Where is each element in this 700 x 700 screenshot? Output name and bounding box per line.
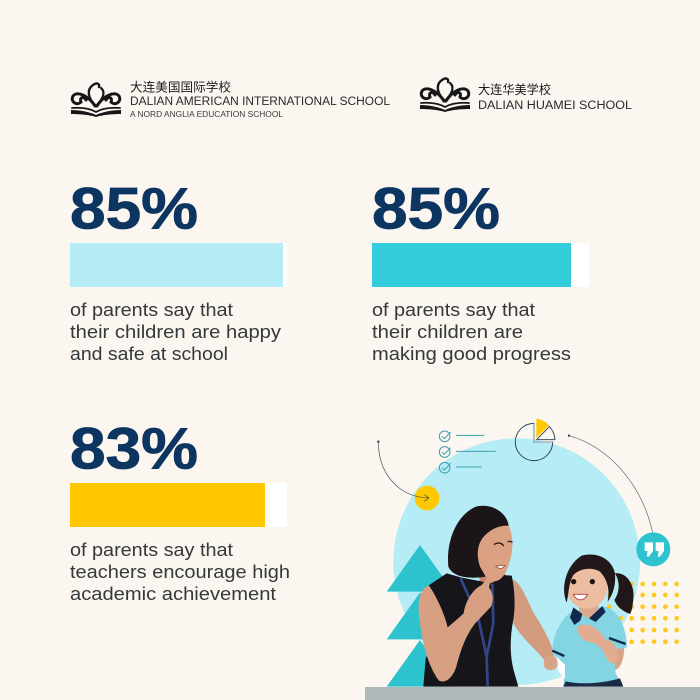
icon: checklist xyxy=(439,431,496,473)
background circle xyxy=(393,438,640,685)
lanyard xyxy=(461,578,493,687)
description: of parents say that xyxy=(372,299,535,320)
stat: academic achievement xyxy=(70,416,290,604)
face xyxy=(477,525,512,581)
description: their children are xyxy=(372,321,523,342)
school name in Chinese: 大连美国国际学校 xyxy=(130,80,231,94)
teacher xyxy=(419,506,554,687)
logo: Dalian American International School xyxy=(71,80,391,119)
description: of parents say that xyxy=(70,539,233,560)
description: and safe at school xyxy=(70,343,228,364)
ponytail xyxy=(614,573,634,614)
left arm and pointing hand xyxy=(419,572,493,681)
shirt xyxy=(552,607,627,687)
collar xyxy=(570,606,606,625)
school name in English: DALIAN HUAMEI SCHOOL xyxy=(478,100,633,112)
child forearm and hand xyxy=(578,624,618,663)
stat: good progress xyxy=(372,176,589,364)
child xyxy=(544,555,634,687)
icon: school crest xyxy=(420,79,470,112)
black dress xyxy=(423,573,518,687)
school name in Chinese: 大连华美学校 xyxy=(478,82,551,97)
school name in English: DALIAN AMERICAN INTERNATIONAL SCHOOL xyxy=(130,96,391,108)
dot grid xyxy=(607,582,679,644)
face xyxy=(566,565,607,609)
icon: school crest xyxy=(71,84,121,117)
percentage: 85% xyxy=(70,176,198,242)
illustration: teacher and child xyxy=(377,419,679,687)
tagline: A NORD ANGLIA EDUCATION SCHOOL xyxy=(130,110,284,119)
sleeve trim xyxy=(552,638,626,656)
stacked triangles xyxy=(387,545,453,687)
progress bar xyxy=(372,243,589,287)
description: of parents say that xyxy=(70,299,233,320)
neck xyxy=(478,567,505,587)
arrow: curved line to yellow circle xyxy=(377,440,439,510)
paper and teacher hand xyxy=(544,655,565,678)
description: their children are happy xyxy=(70,321,282,342)
skirt xyxy=(563,678,623,687)
percentage: 85% xyxy=(372,176,500,242)
description: making good progress xyxy=(372,343,571,364)
stat: happy and safe xyxy=(70,176,287,364)
icon: pie chart xyxy=(515,419,555,461)
icon: quote bubble xyxy=(636,532,670,566)
ground band xyxy=(365,687,700,700)
progress bar xyxy=(70,483,287,527)
logo: Dalian Huamei School xyxy=(420,79,633,112)
description xyxy=(70,299,282,364)
eyes and smile xyxy=(494,541,512,568)
hair xyxy=(448,506,509,578)
right arm xyxy=(513,579,554,661)
description xyxy=(372,299,571,364)
near arm skin xyxy=(610,637,624,671)
description xyxy=(70,539,290,604)
description: academic achievement xyxy=(70,583,276,604)
neck xyxy=(578,605,598,618)
arrow: curved line to quote bubble xyxy=(568,434,653,533)
percentage: 83% xyxy=(70,416,198,482)
eyes and smile xyxy=(571,579,595,600)
hair xyxy=(564,555,615,603)
description: teachers encourage high xyxy=(70,561,290,582)
progress bar xyxy=(70,243,287,287)
